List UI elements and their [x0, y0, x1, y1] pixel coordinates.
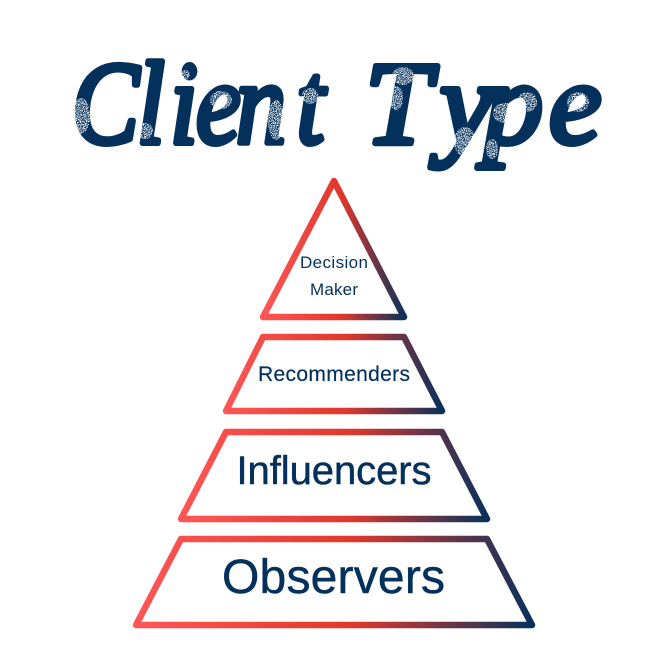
title: Client	[72, 37, 327, 169]
title	[72, 37, 601, 169]
pyramid tier: Recommenders	[226, 337, 442, 411]
pyramid tier: Observers	[136, 539, 532, 625]
pyramid tier: Influencers: Influencers	[236, 449, 432, 493]
pyramid tier: Observers: Observers	[222, 551, 445, 604]
title: Type	[365, 38, 601, 169]
pyramid tier: Influencers	[181, 432, 487, 519]
pyramid tier: Decision Maker: Decision	[300, 253, 368, 272]
pyramid tier: Decision Maker: Maker	[310, 280, 358, 299]
pyramid tier: Decision Maker	[263, 181, 404, 317]
pyramid tier: Recommenders: Recommenders	[258, 363, 410, 386]
